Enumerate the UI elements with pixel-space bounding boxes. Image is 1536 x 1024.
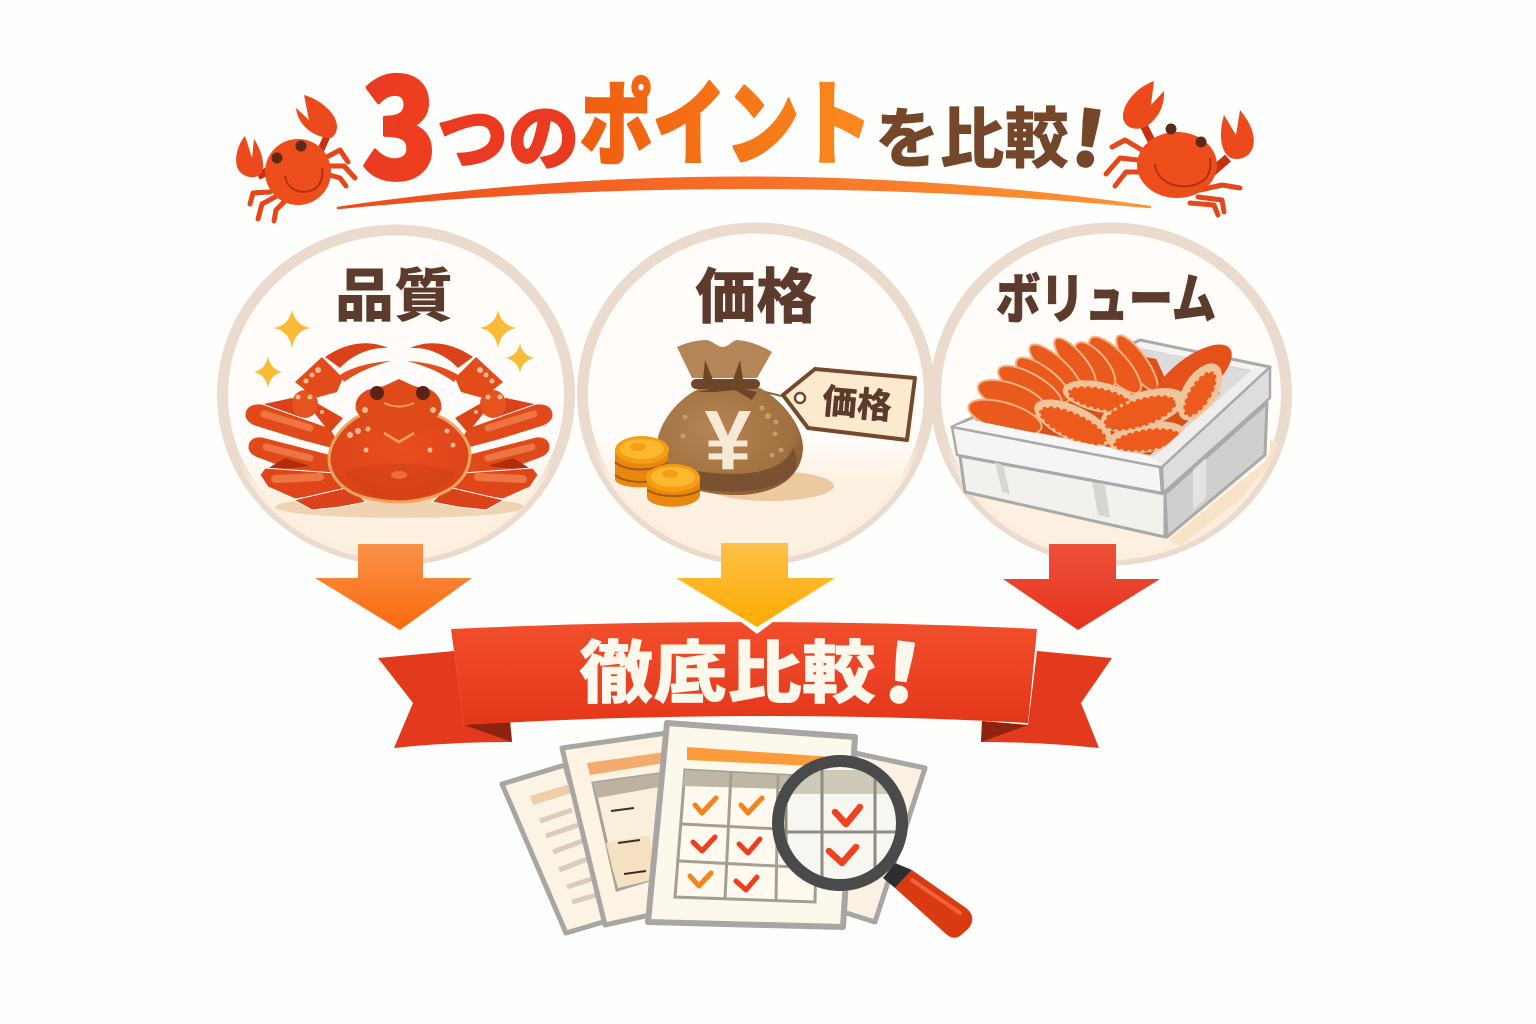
icon: small crab left bbox=[236, 95, 355, 221]
icon: small crab right bbox=[1106, 81, 1254, 215]
icon: sparkles bbox=[254, 310, 534, 388]
document back right bbox=[843, 753, 925, 922]
heading: quality: 品質 bbox=[335, 249, 453, 333]
ribbon text: 徹底比較 bbox=[579, 618, 876, 717]
arrow: red bbox=[1003, 544, 1160, 630]
panel: quality bbox=[220, 230, 580, 570]
crab left legs and claw bbox=[245, 343, 391, 510]
crab leg pieces bbox=[965, 330, 1242, 457]
title: 3 bbox=[362, 21, 437, 218]
ribbon banner: ！ bbox=[855, 605, 950, 731]
title: を比較 bbox=[875, 86, 1069, 182]
ribbon left tail bbox=[378, 651, 512, 748]
document second bbox=[562, 733, 667, 925]
icon: king crab bbox=[245, 343, 553, 510]
icon: price tag bbox=[765, 369, 915, 440]
title: つの bbox=[437, 80, 579, 185]
arrow: orange bbox=[315, 544, 472, 630]
crab shell bbox=[329, 414, 470, 502]
icon: coins bbox=[615, 436, 700, 507]
heading: price: 価格 bbox=[695, 249, 817, 336]
yen sign: ¥ bbox=[705, 393, 752, 487]
icon: foam box of crab legs bbox=[952, 330, 1270, 537]
title underline brush stroke bbox=[338, 178, 1150, 208]
crab right legs and claw bbox=[407, 343, 553, 510]
heading: volume: ボリューム bbox=[996, 255, 1216, 334]
icon: money bag bbox=[657, 340, 834, 501]
document left bbox=[502, 765, 610, 933]
title: ！ bbox=[1044, 73, 1134, 193]
panel: volume bbox=[935, 228, 1290, 575]
ribbon banner bbox=[378, 605, 1112, 748]
icon: comparison documents with magnifier bbox=[502, 723, 972, 938]
magnifying glass bbox=[778, 761, 972, 938]
arrow: yellow bbox=[676, 543, 835, 634]
panel: price bbox=[580, 228, 935, 570]
tag label: 価格 bbox=[820, 373, 894, 430]
title bbox=[362, 21, 1134, 218]
ribbon right tail bbox=[981, 651, 1112, 748]
document main with check table bbox=[648, 723, 855, 927]
title: ポイント bbox=[580, 51, 872, 184]
